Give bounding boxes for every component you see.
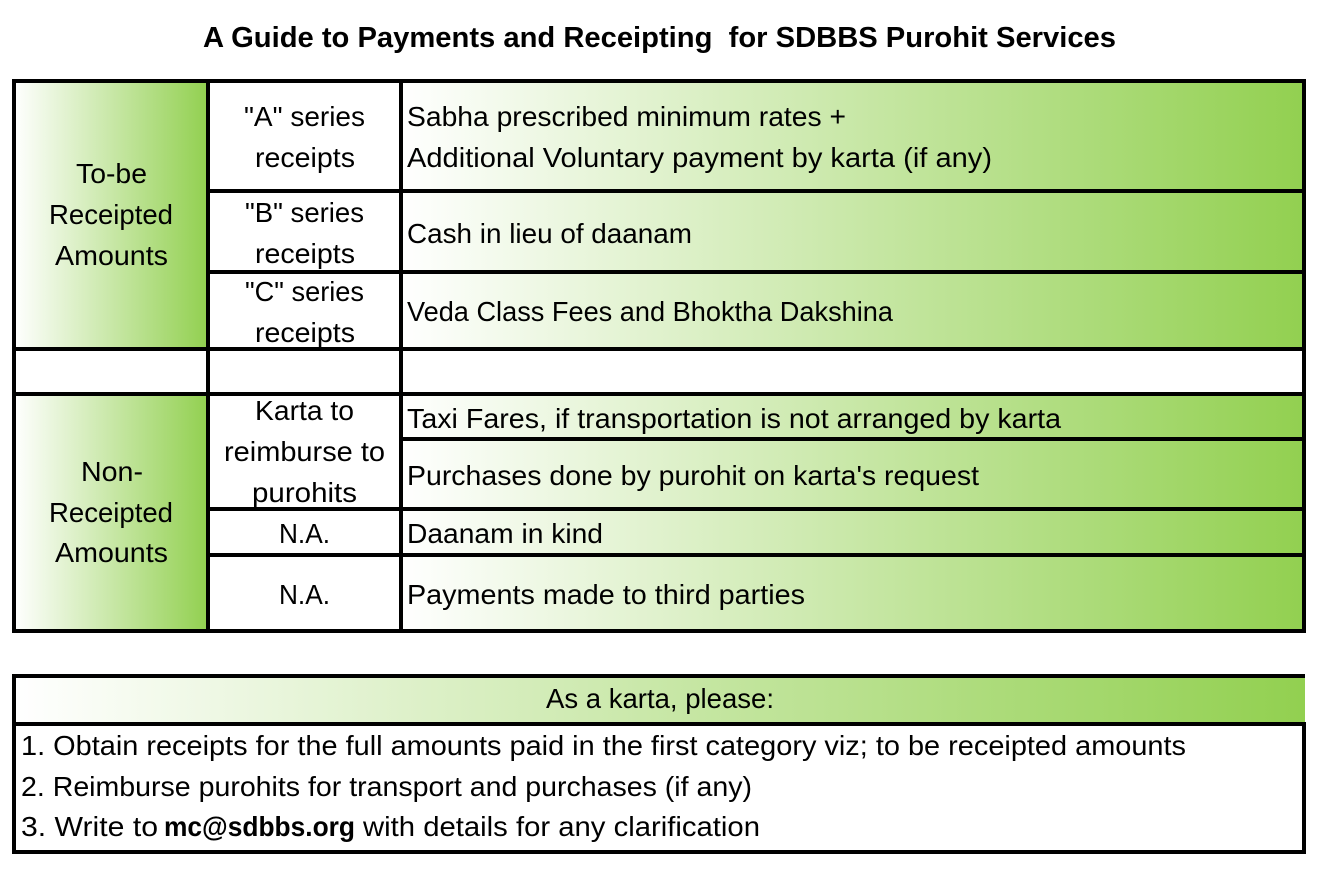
receipt type: B series: [245, 197, 364, 269]
cell backgrounds: [14, 81, 1304, 631]
row label: non-receipted amounts: Non-: [81, 456, 143, 487]
receipt type: C series: receipts: [255, 317, 355, 348]
description: veda class fees: Veda Class Fees and Bhoktha Dakshina: [407, 296, 893, 327]
receipt type: karta to reimburse: Karta to: [255, 395, 354, 426]
instruction 3: with details for any clarification: [362, 811, 760, 842]
row label: non-receipted amounts: Amounts: [55, 537, 168, 568]
row label: non-receipted amounts: [49, 456, 173, 568]
row label: non-receipted amounts: Receipted: [49, 497, 173, 528]
receipt type: karta to reimburse: [224, 395, 385, 508]
row label: to-be receipted amounts: [49, 158, 173, 271]
instructions header bar: [12, 674, 1305, 722]
title: A Guide to Payments and Receipting for SDBBS Purohit Services: [203, 22, 1116, 54]
receipt type: B series: receipts: [255, 238, 355, 269]
table grid lines: [12, 79, 1306, 633]
description: third party payments: Payments made to third parties: [407, 579, 805, 610]
instruction 2: 2. Reimburse purohits for transport and purchases (if any): [21, 771, 752, 802]
receipt type: A series: [244, 101, 365, 173]
row label: to-be receipted amounts: Amounts: [55, 240, 168, 271]
description: minimum rates and voluntary payment: Additional Voluntary payment by karta (if any): [407, 142, 992, 173]
receipt type: C series: "C" series: [245, 276, 364, 307]
instruction 3: [21, 811, 760, 842]
row label: to-be receipted amounts: To-be: [76, 158, 147, 189]
receipt type: N.A. third parties row: N.A.: [279, 579, 330, 610]
receipt type: A series: receipts: [255, 142, 355, 173]
receipt type: N.A. daanam row: N.A.: [279, 518, 330, 549]
description: minimum rates and voluntary payment: [407, 101, 992, 173]
panel: payments table: [12, 79, 1306, 633]
row label: to-be receipted amounts: Receipted: [49, 199, 173, 230]
receipt type: C series: [245, 276, 364, 348]
description: taxi fares: Taxi Fares, if transportation is not arranged by karta: [407, 403, 1061, 434]
receipt type: B series: "B" series: [245, 197, 364, 228]
instruction 3: 3. Write to: [21, 811, 158, 842]
receipt type: karta to reimburse: purohits: [252, 477, 357, 508]
receipt type: karta to reimburse: reimburse to: [224, 436, 385, 467]
instruction 3: mc@sdbbs.org: [164, 811, 355, 842]
instructions box borders: [12, 674, 1306, 854]
instruction 1: 1. Obtain receipts for the full amounts paid in the first category viz; to be receipted amounts: [21, 730, 1186, 761]
description: minimum rates and voluntary payment: Sabha prescribed minimum rates +: [407, 101, 846, 132]
receipt type: A series: "A" series: [244, 101, 365, 132]
description: daanam in kind: Daanam in kind: [407, 518, 603, 549]
panel: karta instructions: [12, 674, 1306, 854]
instructions header bar: As a karta, please:: [546, 683, 774, 714]
description: cash in lieu: Cash in lieu of daanam: [407, 218, 692, 249]
description: purchases: Purchases done by purohit on karta's request: [407, 460, 979, 491]
